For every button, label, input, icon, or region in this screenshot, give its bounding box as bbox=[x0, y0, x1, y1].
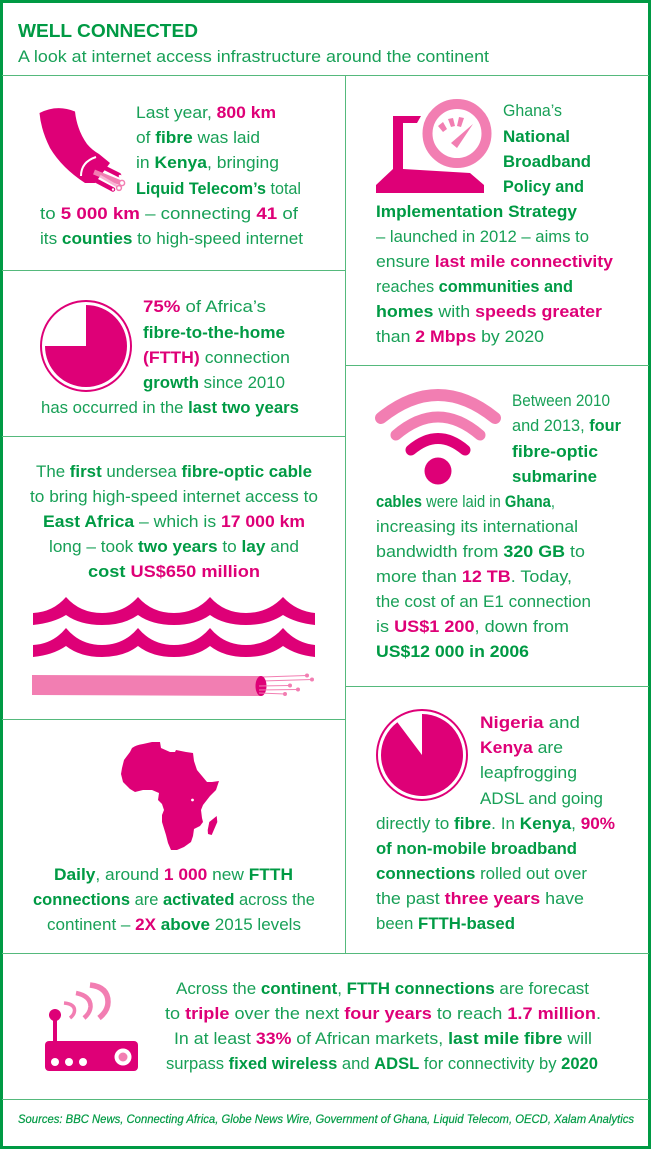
panel: undersea cable bbox=[30, 463, 318, 696]
text: Nigeria and Kenya: of non-mobile broadband bbox=[376, 840, 577, 858]
text: Ghana broadband policy: National bbox=[503, 128, 570, 146]
text: daily connections: connections are activated across the bbox=[33, 891, 315, 909]
text: Ghana submarine cables: more than 12 TB. Today, bbox=[376, 568, 572, 586]
panel: Ghana submarine cables bbox=[376, 392, 622, 661]
text: Kenya fibre: Last year, 800 km bbox=[136, 104, 276, 122]
text: Nigeria and Kenya: ADSL and going bbox=[480, 790, 603, 808]
text: Nigeria and Kenya: been FTTH-based bbox=[376, 915, 515, 933]
text: Ghana submarine cables bbox=[376, 392, 622, 661]
panel: Nigeria and Kenya bbox=[376, 710, 615, 933]
text: forecast: Across the continent, FTTH connections are forecast bbox=[176, 980, 589, 998]
text: Ghana broadband policy: homes with speeds greater bbox=[376, 303, 603, 321]
text: Nigeria and Kenya: leapfrogging bbox=[480, 764, 577, 782]
text: undersea cable bbox=[30, 463, 318, 581]
panel: FTTH growth bbox=[41, 298, 299, 417]
text: Ghana broadband policy bbox=[376, 102, 614, 346]
text: Kenya fibre: to 5 000 km – connecting 41 of bbox=[40, 205, 298, 223]
text: FTTH growth: fibre-to-the-home bbox=[143, 324, 285, 342]
text: Nigeria and Kenya: Kenya are bbox=[480, 739, 563, 757]
text: Nigeria and Kenya bbox=[376, 714, 615, 933]
text: daily connections: continent – 2X above 2015 levels bbox=[47, 916, 301, 934]
icon: router bbox=[45, 985, 138, 1071]
text: Ghana submarine cables: increasing its international bbox=[376, 518, 578, 536]
text: Kenya fibre: Liquid Telecom’s total bbox=[136, 180, 301, 198]
text: Ghana submarine cables: is US$1 200 , down from bbox=[376, 618, 569, 636]
text: Ghana broadband policy: Policy and bbox=[503, 178, 584, 196]
panel: Kenya fibre bbox=[40, 104, 303, 248]
text: Ghana submarine cables: fibre-optic bbox=[512, 443, 598, 461]
text: Ghana submarine cables: submarine bbox=[512, 468, 597, 486]
text: undersea cable: The first undersea fibre-optic cable bbox=[36, 463, 312, 481]
title: A look at internet access infrastructure around the continent bbox=[18, 47, 489, 66]
text: undersea cable: cost US$650 million bbox=[88, 563, 260, 581]
text: Ghana submarine cables: Between 2010 bbox=[512, 392, 610, 410]
text: Kenya fibre: of fibre was laid bbox=[136, 129, 260, 147]
icon: 90% pie chart bbox=[377, 710, 467, 800]
text: Ghana broadband policy: – launched in 2012 – aims to bbox=[376, 228, 589, 246]
text: Kenya fibre bbox=[40, 104, 303, 248]
icon: map of Africa bbox=[121, 742, 219, 850]
text: Ghana submarine cables: bandwidth from 320 GB to bbox=[376, 543, 585, 561]
text: Ghana submarine cables: the cost of an E1 connection bbox=[376, 593, 591, 611]
title: WELL CONNECTED bbox=[18, 21, 198, 41]
text: undersea cable: to bring high-speed internet access to bbox=[30, 488, 318, 506]
text: Ghana broadband policy: than 2 Mbps by 2020 bbox=[376, 328, 544, 346]
icon: fibre cable bbox=[40, 108, 125, 191]
text: daily connections bbox=[33, 866, 315, 934]
text: forecast bbox=[165, 980, 601, 1073]
panel: daily connections bbox=[33, 742, 315, 934]
text: FTTH growth: (FTTH) connection bbox=[143, 349, 290, 367]
icon: fibre-optic cable bbox=[32, 674, 314, 696]
text: Ghana broadband policy: Implementation Strategy bbox=[376, 203, 578, 221]
text: undersea cable: long – took two years to lay and bbox=[49, 538, 299, 556]
text: Kenya fibre: its counties to high-speed internet bbox=[40, 230, 303, 248]
icon: 75% pie chart bbox=[41, 301, 131, 391]
text: forecast: In at least 33% of African markets, last mile fibre will bbox=[174, 1030, 592, 1048]
text: forecast: surpass fixed wireless and ADSL for connectivity by 2020 bbox=[166, 1055, 598, 1073]
text: Nigeria and Kenya: directly to fibre. In Kenya, 90% bbox=[376, 815, 615, 833]
text: Nigeria and Kenya: the past three years have bbox=[376, 890, 584, 908]
text: Ghana submarine cables: and 2013, four bbox=[512, 417, 622, 435]
text: FTTH growth: growth since 2010 bbox=[143, 374, 285, 392]
text: Ghana broadband policy: Ghana’s bbox=[503, 102, 562, 120]
text: Ghana submarine cables: cables were laid in Ghana, bbox=[376, 493, 555, 511]
text: FTTH growth bbox=[41, 298, 299, 417]
text: daily connections: Daily, around 1 000 new FTTH bbox=[54, 866, 293, 884]
text: undersea cable: East Africa – which is 17 000 km bbox=[43, 513, 305, 531]
icon: waves bbox=[33, 597, 315, 657]
icon: wifi signal bbox=[381, 395, 495, 484]
icon: speed gauge bbox=[376, 96, 495, 193]
title bbox=[18, 21, 489, 66]
panel: Ghana broadband policy bbox=[376, 96, 614, 346]
text: Ghana broadband policy: ensure last mile connectivity bbox=[376, 253, 614, 271]
text: FTTH growth: has occurred in the last two years bbox=[41, 399, 299, 417]
panel: forecast bbox=[45, 980, 601, 1073]
text: Ghana broadband policy: Broadband bbox=[503, 153, 591, 171]
text: Ghana broadband policy: reaches communities and bbox=[376, 278, 573, 296]
sources: Sources: BBC News, Connecting Africa, Globe News Wire, Government of Ghana, Liquid Telecom, OECD, Xalam Analytics bbox=[18, 1114, 634, 1126]
text: forecast: to triple over the next four years to reach 1.7 million . bbox=[165, 1005, 601, 1023]
text: Nigeria and Kenya: Nigeria and bbox=[480, 714, 580, 732]
text: Nigeria and Kenya: connections rolled out over bbox=[376, 865, 588, 883]
text: FTTH growth: 75% of Africa’s bbox=[143, 298, 266, 316]
text: Ghana submarine cables: US$12 000 in 2006 bbox=[376, 643, 529, 661]
text: Kenya fibre: in Kenya, bringing bbox=[136, 154, 279, 172]
